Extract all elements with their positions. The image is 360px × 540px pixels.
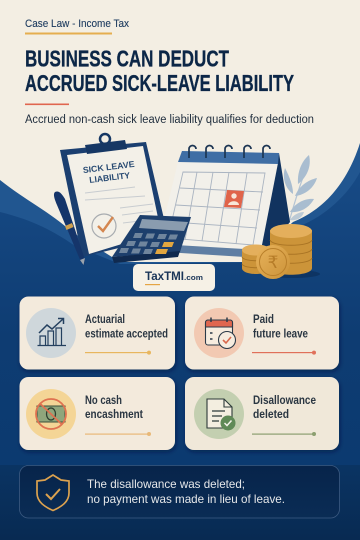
card text xyxy=(85,312,168,340)
icon: pen xyxy=(54,191,85,265)
card text: estimate accepted xyxy=(85,326,168,340)
illustration: calendar xyxy=(158,146,290,258)
illustration: rupee coins: ₹ xyxy=(268,253,278,272)
logo badge: .com xyxy=(184,273,203,282)
card text: future leave xyxy=(253,326,308,340)
title: BUSINESS CAN DEDUCT xyxy=(25,46,229,72)
card text xyxy=(253,393,316,421)
clipboard heading: LIABILITY xyxy=(89,170,131,185)
short coin stack xyxy=(242,250,270,274)
conclusion text xyxy=(87,477,285,506)
calendar rings xyxy=(189,146,270,158)
card text: Actuarial xyxy=(85,312,125,326)
card text: Disallowance xyxy=(253,393,316,407)
conclusion panel xyxy=(20,466,340,518)
title accent rule xyxy=(25,104,69,105)
clipboard clip xyxy=(85,140,127,154)
accent line xyxy=(252,432,316,436)
marked day xyxy=(224,190,244,208)
front coin xyxy=(256,245,290,279)
icon: growth chart xyxy=(26,308,76,358)
category label: Case Law - Income Tax xyxy=(25,18,129,30)
card text: No cash xyxy=(85,393,122,407)
title xyxy=(25,46,294,96)
card text: Paid xyxy=(253,312,274,326)
card: paid future leave xyxy=(185,296,339,370)
clipboard heading xyxy=(82,159,135,185)
accent line xyxy=(85,351,151,355)
icon: calendar check xyxy=(194,308,244,358)
subtitle: Accrued non-cash sick leave liability qualifies for deduction xyxy=(25,114,314,126)
label underline xyxy=(25,32,112,34)
card text: deleted xyxy=(253,407,289,421)
calculator display xyxy=(139,219,188,231)
icon: document check xyxy=(194,389,244,439)
card: actuarial estimate xyxy=(20,296,175,370)
card text: encashment xyxy=(85,407,143,421)
card text xyxy=(85,393,143,421)
card: disallowance deleted xyxy=(185,377,339,450)
logo badge xyxy=(133,264,215,291)
icon: shield check xyxy=(37,475,69,510)
card text xyxy=(253,312,308,340)
icon: crossed out banknote xyxy=(26,389,76,439)
accent line xyxy=(85,432,151,436)
illustration: calculator xyxy=(112,215,191,263)
conclusion text: no payment was made in lieu of leave. xyxy=(87,492,285,506)
conclusion text: The disallowance was deleted; xyxy=(87,477,245,491)
check mark seal xyxy=(92,214,116,238)
calendar grid xyxy=(168,172,265,245)
accent line xyxy=(252,351,316,355)
tall coin stack xyxy=(270,230,312,275)
logo badge: TaxTMI xyxy=(145,269,184,283)
illustration: rupee coins xyxy=(242,224,320,279)
illustration: clipboard xyxy=(60,134,168,257)
card: no cash encashment xyxy=(20,377,175,450)
decorative blue wave xyxy=(0,143,360,540)
icon: leaves xyxy=(284,155,317,222)
clipboard heading: SICK LEAVE xyxy=(82,159,135,175)
